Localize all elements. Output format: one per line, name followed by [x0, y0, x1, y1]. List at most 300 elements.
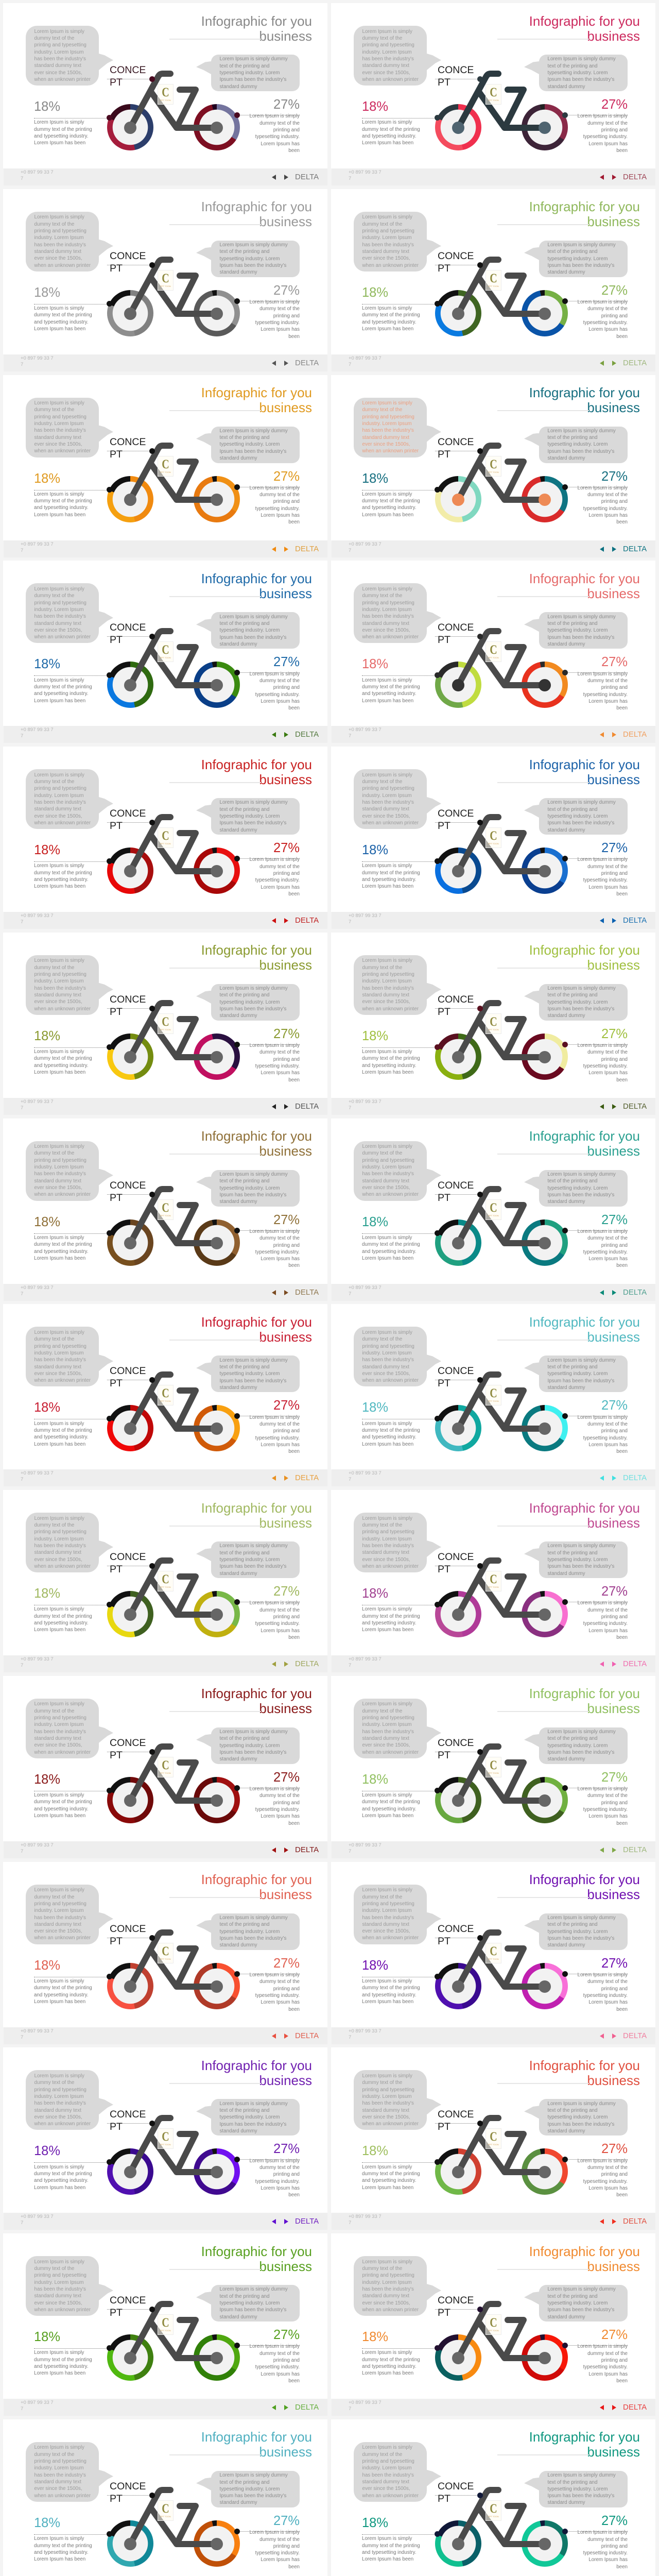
bike frame — [328, 743, 656, 898]
logo — [158, 1571, 174, 1591]
right description: dummy text of the — [587, 1235, 628, 1241]
title: Infographic for you — [201, 1128, 312, 1144]
right description: Lorem Ipsum has — [588, 141, 628, 147]
title: Infographic for you — [201, 2244, 312, 2259]
title: Infographic for you — [201, 13, 312, 29]
left description: and typesetting industry. — [34, 133, 88, 139]
right description — [250, 485, 300, 525]
right speech bubble: Ipsum has been the industry's — [548, 635, 614, 640]
concept label: CONCE — [110, 436, 146, 448]
right description: been — [616, 705, 628, 711]
concept label — [438, 2480, 474, 2505]
right description: Lorem Ipsum is simply — [578, 671, 628, 677]
logo — [485, 2128, 501, 2149]
right wheel dot — [234, 112, 240, 118]
logo — [485, 2314, 501, 2335]
footer — [332, 1469, 655, 1486]
right hub — [539, 865, 551, 877]
logo — [485, 1757, 501, 1777]
right percentage: 27% — [601, 2142, 628, 2156]
right description: printing and — [273, 2544, 300, 2549]
right description — [238, 1414, 300, 1455]
right speech bubble: text of the printing and — [548, 807, 597, 812]
right description: dummy text of the — [259, 1793, 300, 1799]
bike frame — [0, 2230, 328, 2385]
right description: printing and — [601, 1614, 628, 1620]
left speech bubble: when an unknown printer — [34, 1378, 91, 1383]
right description: Lorem Ipsum has — [588, 1628, 628, 1634]
logo: PPT TOON — [488, 1214, 499, 1217]
title: Infographic for you — [529, 757, 640, 772]
left speech bubble — [26, 1327, 99, 1386]
logo: C — [490, 1201, 497, 1215]
left hub — [452, 1980, 464, 1993]
right speech bubble: Lorem Ipsum is simply dummy — [548, 800, 616, 805]
handlebar dot — [477, 1749, 483, 1755]
left speech bubble: when an unknown printer — [34, 1564, 91, 1569]
left speech bubble: dummy text of the — [34, 1522, 74, 1528]
right description: Lorem Ipsum is simply — [578, 2158, 628, 2164]
handlebar dot — [149, 1935, 155, 1941]
left speech bubble: printing and typesetting — [34, 414, 86, 420]
logo — [485, 1013, 501, 1034]
right description: Lorem Ipsum is simply — [578, 113, 628, 119]
previous arrow — [272, 732, 276, 737]
phone — [349, 727, 381, 739]
phone: 7 — [349, 176, 351, 181]
right description: typesetting industry. — [255, 877, 300, 883]
concept label — [110, 993, 146, 1018]
brand: DELTA — [623, 173, 647, 181]
left speech bubble: printing and typesetting — [362, 42, 414, 48]
left speech bubble: ever since the 1500s, — [362, 1742, 410, 1748]
left speech bubble: industry. Lorem Ipsum — [34, 793, 84, 799]
right description: dummy text of the — [259, 306, 300, 312]
concept label — [438, 807, 474, 832]
previous arrow — [600, 918, 604, 923]
right speech bubble: standard dummy — [548, 1942, 585, 1948]
left speech bubble: Lorem Ipsum is simply — [362, 1144, 412, 1149]
left speech bubble: industry. Lorem Ipsum — [34, 1350, 84, 1356]
right speech bubble: typesetting industry. Lorem — [548, 2486, 608, 2492]
right description: printing and — [273, 313, 300, 319]
concept label: PT — [110, 2493, 123, 2504]
right speech bubble: Ipsum has been the industry's — [219, 1192, 286, 1198]
phone — [21, 2214, 54, 2226]
right speech bubble: Lorem Ipsum is simply dummy — [219, 428, 288, 434]
footer — [4, 1284, 327, 1301]
footer — [332, 912, 655, 929]
concept label — [110, 621, 146, 646]
right description: typesetting industry. — [255, 2550, 300, 2556]
right speech bubble: text of the printing and — [548, 1550, 597, 1556]
concept label: PT — [438, 449, 450, 460]
left speech bubble — [354, 2070, 427, 2130]
left speech bubble: industry. Lorem Ipsum — [362, 2280, 412, 2285]
left speech bubble: has been the industry's — [362, 2100, 414, 2106]
left speech bubble: Lorem Ipsum is simply — [362, 1330, 412, 1335]
handlebar dot — [149, 2493, 155, 2498]
right speech bubble — [539, 1541, 628, 1578]
left speech bubble: ever since the 1500s, — [362, 1371, 410, 1377]
right speech bubble: standard dummy — [548, 269, 585, 275]
left description: Lorem Ipsum is simply — [362, 1235, 412, 1241]
left wheel — [107, 1405, 153, 1451]
previous arrow — [272, 1104, 276, 1109]
left wheel dot — [107, 1788, 112, 1793]
right percentage: 27% — [601, 1213, 628, 1227]
right speech bubble: text of the printing and — [219, 63, 269, 69]
logo: C — [162, 86, 169, 99]
left speech bubble: printing and typesetting — [362, 1158, 414, 1163]
logo: PPT TOON — [160, 1958, 171, 1960]
left speech bubble: industry. Lorem Ipsum — [34, 49, 84, 55]
concept label: CONCE — [110, 622, 146, 633]
phone — [349, 170, 381, 181]
title: Infographic for you — [529, 385, 640, 400]
left description: Lorem Ipsum is simply — [34, 1978, 84, 1984]
right wheel dot — [562, 1785, 568, 1791]
footer — [332, 726, 655, 743]
left description: Lorem Ipsum is simply — [362, 2164, 412, 2170]
left description: and typesetting industry. — [362, 1063, 416, 1069]
right description: been — [616, 1635, 628, 1640]
right speech bubble: Lorem Ipsum is simply dummy — [548, 1915, 616, 1921]
right wheel dot — [562, 2157, 568, 2162]
left wheel — [107, 1219, 153, 1266]
left speech bubble — [26, 2256, 99, 2316]
previous arrow — [272, 2219, 276, 2224]
right description: been — [616, 519, 628, 525]
right speech bubble: standard dummy — [219, 1571, 257, 1577]
right wheel — [522, 476, 568, 522]
logo: C — [162, 829, 169, 843]
right speech bubble: typesetting industry. Lorem — [219, 1743, 280, 1749]
right percentage: 27% — [273, 2514, 300, 2528]
left speech bubble: has been the industry's — [362, 986, 414, 991]
right speech bubble: standard dummy — [548, 1013, 585, 1019]
left description — [362, 862, 420, 890]
right description: Lorem Ipsum has — [588, 885, 628, 890]
left description: and typesetting industry. — [34, 877, 88, 883]
left speech bubble: ever since the 1500s, — [362, 1928, 410, 1934]
right wheel dot — [234, 1413, 240, 1419]
left hub — [124, 1980, 136, 1993]
right hub — [539, 1237, 551, 1249]
right speech bubble: Ipsum has been the industry's — [548, 2307, 614, 2313]
right description — [566, 1600, 628, 1641]
logo — [158, 1757, 174, 1777]
right description: Lorem Ipsum has — [261, 141, 300, 147]
right speech bubble: text of the printing and — [219, 1364, 269, 1370]
left percentage: 18% — [34, 285, 60, 300]
left description: and typesetting industry. — [362, 133, 416, 139]
left speech bubble: has been the industry's — [34, 800, 86, 805]
bike frame — [328, 1859, 656, 2013]
right description: dummy text of the — [259, 1607, 300, 1613]
left hub — [452, 1237, 464, 1249]
handlebar dot — [477, 1006, 483, 1011]
left speech bubble: standard dummy text — [362, 2479, 409, 2485]
concept label — [438, 64, 474, 88]
left description: Lorem Ipsum has been — [34, 2185, 85, 2191]
logo: PPT TOON — [488, 1028, 499, 1031]
left speech bubble — [26, 212, 99, 272]
left hub — [124, 1237, 136, 1249]
left hub — [452, 2352, 464, 2364]
concept label: PT — [438, 77, 450, 88]
bike frame — [130, 443, 212, 503]
left speech bubble: standard dummy text — [34, 435, 81, 440]
right speech bubble: Ipsum has been the industry's — [548, 1750, 614, 1755]
left description: Lorem Ipsum has been — [34, 1999, 85, 2005]
left speech bubble: Lorem Ipsum is simply — [34, 2073, 84, 2079]
right speech bubble: Ipsum has been the industry's — [548, 1192, 614, 1198]
logo — [158, 2500, 174, 2521]
right speech bubble: text of the printing and — [219, 1550, 269, 1556]
logo: PPT TOON — [488, 2143, 499, 2146]
slide 9 — [0, 743, 328, 929]
handlebar dot — [477, 2307, 483, 2312]
right description: been — [288, 1635, 300, 1640]
left speech bubble — [26, 1699, 99, 1758]
left speech bubble — [354, 212, 427, 272]
right speech bubble: standard dummy — [219, 269, 257, 275]
right speech bubble: Ipsum has been the industry's — [219, 1564, 286, 1569]
right description: been — [616, 891, 628, 897]
right wheel dot — [234, 484, 240, 490]
bike frame — [328, 557, 656, 712]
left wheel dot — [107, 115, 112, 121]
right description: dummy text of the — [587, 121, 628, 126]
logo — [158, 270, 174, 291]
right speech bubble: typesetting industry. Lorem — [219, 814, 280, 819]
left description: and typesetting industry. — [362, 505, 416, 511]
right wheel — [194, 2148, 240, 2195]
right speech bubble: typesetting industry. Lorem — [219, 628, 280, 633]
handlebar dot — [477, 448, 483, 454]
right speech bubble — [539, 798, 628, 835]
left wheel — [435, 2334, 481, 2381]
left description: Lorem Ipsum has been — [34, 1627, 85, 1633]
concept label: PT — [110, 1192, 123, 1204]
next arrow — [612, 361, 616, 366]
right speech bubble: Lorem Ipsum is simply dummy — [219, 56, 288, 62]
left description — [362, 2349, 420, 2377]
left description: and typesetting industry. — [362, 877, 416, 883]
left wheel dot — [107, 1416, 112, 1421]
right speech bubble — [211, 2285, 300, 2321]
logo: C — [162, 272, 169, 285]
left speech bubble: industry. Lorem Ipsum — [34, 1536, 84, 1542]
right speech bubble: Lorem Ipsum is simply dummy — [219, 800, 288, 805]
right description: typesetting industry. — [255, 1621, 300, 1626]
right description: typesetting industry. — [255, 1063, 300, 1069]
left speech bubble: has been the industry's — [362, 1543, 414, 1549]
right speech bubble: Lorem Ipsum is simply dummy — [548, 1543, 616, 1549]
handlebar dot — [149, 448, 155, 454]
right hub — [211, 2538, 223, 2550]
right speech bubble: standard dummy — [219, 1199, 257, 1205]
phone: +0 897 99 33 7 — [21, 2028, 54, 2034]
phone: 7 — [21, 919, 23, 925]
logo: PPT TOON — [160, 656, 171, 659]
left speech bubble: Lorem Ipsum is simply — [362, 1516, 412, 1521]
left description: and typesetting industry. — [34, 1434, 88, 1440]
title — [201, 571, 312, 601]
next arrow — [612, 175, 616, 180]
left speech bubble — [26, 398, 99, 457]
phone — [349, 2400, 381, 2412]
concept label: PT — [110, 2121, 123, 2132]
left speech bubble: when an unknown printer — [362, 820, 419, 826]
right wheel — [522, 1405, 568, 1451]
left speech bubble: when an unknown printer — [34, 1750, 91, 1755]
right speech bubble: typesetting industry. Lorem — [219, 2114, 280, 2120]
left hub — [124, 865, 136, 877]
right speech bubble — [211, 241, 300, 277]
left wheel — [107, 2334, 153, 2381]
right description: Lorem Ipsum has — [261, 1628, 300, 1634]
left percentage: 18% — [362, 2516, 388, 2530]
right percentage: 27% — [273, 1398, 300, 1413]
right speech bubble: standard dummy — [548, 641, 585, 647]
left speech bubble: industry. Lorem Ipsum — [362, 1908, 412, 1913]
handlebar dot — [477, 262, 483, 268]
left description: Lorem Ipsum is simply — [362, 1978, 412, 1984]
concept label: PT — [438, 1936, 450, 1947]
handlebar dot — [149, 1563, 155, 1569]
left wheel — [435, 104, 481, 150]
right speech bubble: Lorem Ipsum is simply dummy — [548, 1172, 616, 1177]
right description: typesetting industry. — [583, 1249, 628, 1255]
logo: C — [490, 1386, 497, 1400]
right description: been — [288, 1263, 300, 1268]
right speech bubble: typesetting industry. Lorem — [219, 1557, 280, 1563]
logo: PPT TOON — [488, 285, 499, 287]
brand: DELTA — [295, 2403, 319, 2412]
left speech bubble — [354, 1513, 427, 1572]
brand: DELTA — [623, 1845, 647, 1854]
left wheel — [435, 1777, 481, 1823]
logo: C — [490, 829, 497, 843]
phone — [349, 1656, 381, 1669]
left speech bubble: printing and typesetting — [34, 1529, 86, 1535]
next arrow — [612, 2219, 616, 2224]
title — [431, 943, 640, 973]
right speech bubble: Lorem Ipsum is simply dummy — [548, 1358, 616, 1363]
left speech bubble: standard dummy text — [34, 1178, 81, 1184]
left speech bubble — [26, 769, 99, 829]
concept label — [110, 807, 146, 832]
left speech bubble — [26, 1141, 99, 1201]
left description: Lorem Ipsum has been — [362, 2185, 413, 2191]
phone: 7 — [349, 733, 351, 739]
right description — [566, 2343, 628, 2384]
title: Infographic for you — [529, 1500, 640, 1516]
right speech bubble: Ipsum has been the industry's — [219, 1006, 286, 1012]
handlebar dot — [149, 1192, 155, 1197]
left wheel — [435, 662, 481, 708]
bike frame — [328, 2230, 656, 2385]
right wheel — [194, 1405, 240, 1451]
previous arrow — [272, 175, 276, 180]
right wheel — [522, 2520, 568, 2567]
right description — [578, 299, 628, 340]
brand: DELTA — [295, 1288, 319, 1297]
left speech bubble: printing and typesetting — [362, 228, 414, 234]
title — [103, 2244, 312, 2274]
concept label: CONCE — [438, 2109, 474, 2120]
left description: and typesetting industry. — [34, 1620, 88, 1626]
right percentage: 27% — [273, 1584, 300, 1599]
footer — [4, 1469, 327, 1486]
left percentage: 18% — [34, 1586, 60, 1601]
bike frame — [458, 71, 540, 131]
right speech bubble: standard dummy — [219, 827, 257, 833]
left description: Lorem Ipsum is simply — [34, 492, 84, 497]
right description: typesetting industry. — [255, 2179, 300, 2184]
right speech bubble: standard dummy — [219, 641, 257, 647]
left speech bubble: Lorem Ipsum is simply — [34, 1144, 84, 1149]
right hub — [211, 494, 223, 506]
left speech bubble — [354, 2442, 427, 2502]
title: business — [259, 772, 312, 787]
left description: Lorem Ipsum is simply — [34, 120, 84, 125]
left description: Lorem Ipsum is simply — [362, 492, 412, 497]
left speech bubble: has been the industry's — [34, 1729, 86, 1735]
right speech bubble: Lorem Ipsum is simply dummy — [219, 1358, 288, 1363]
right speech bubble: Lorem Ipsum is simply dummy — [219, 986, 288, 991]
footer — [332, 1655, 655, 1672]
right wheel dot — [562, 1042, 568, 1047]
left speech bubble: standard dummy text — [362, 1922, 409, 1927]
left speech bubble: dummy text of the — [34, 965, 74, 971]
logo — [485, 2500, 501, 2521]
title — [201, 13, 312, 43]
next arrow — [284, 1104, 288, 1109]
right speech bubble: Lorem Ipsum is simply dummy — [548, 428, 616, 434]
right wheel — [194, 104, 240, 150]
phone — [349, 1470, 381, 1483]
left wheel dot — [435, 301, 440, 307]
left wheel dot — [435, 487, 440, 493]
left wheel — [435, 1963, 481, 2009]
logo — [485, 1199, 501, 1220]
right description: been — [288, 148, 300, 154]
left speech bubble — [354, 26, 427, 86]
phone: 7 — [21, 2220, 23, 2226]
right description — [566, 1786, 628, 1827]
left hub — [452, 679, 464, 691]
left description — [34, 1048, 92, 1076]
left description: Lorem Ipsum is simply — [362, 120, 412, 125]
previous arrow — [272, 1290, 276, 1295]
bike frame — [130, 628, 212, 688]
next arrow — [612, 1476, 616, 1481]
right description: Lorem Ipsum has — [261, 327, 300, 332]
concept label: CONCE — [438, 808, 474, 819]
right description: printing and — [273, 685, 300, 690]
footer — [332, 1098, 655, 1115]
right description: typesetting industry. — [583, 1063, 628, 1069]
left speech bubble: dummy text of the — [362, 2080, 402, 2086]
right wheel — [194, 290, 240, 336]
right description: Lorem Ipsum has — [588, 1999, 628, 2005]
right wheel dot — [562, 2343, 568, 2348]
brand: DELTA — [295, 1473, 319, 1482]
left description: dummy text of the printing — [362, 1614, 420, 1619]
